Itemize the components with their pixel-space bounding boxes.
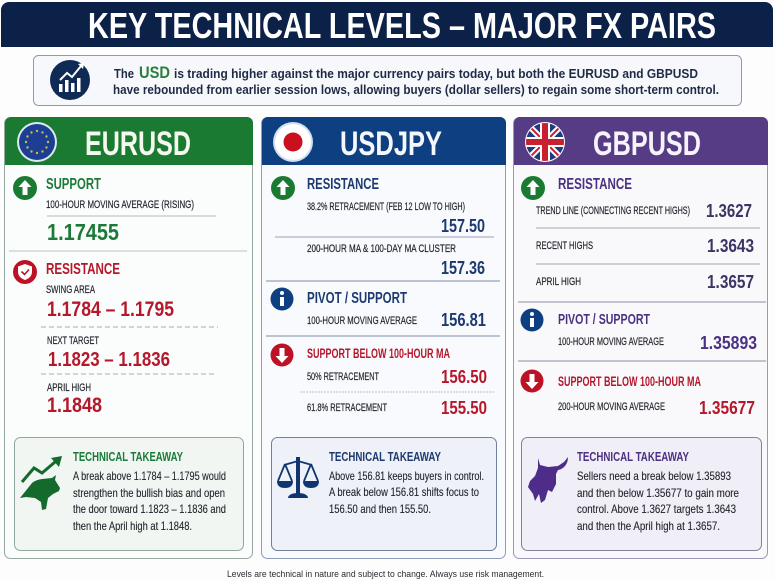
value: april high: 1.1848 — [47, 394, 102, 417]
icon: up arrow — [521, 176, 545, 200]
pair name: EURUSD: EURUSD — [85, 125, 191, 163]
takeaway text: A break above 1.1784 – 1.1795 would — [73, 469, 226, 483]
panel header: GBPUSD — [514, 117, 768, 165]
icon: bear market bull — [528, 457, 568, 503]
panel: EURUSD — [4, 117, 253, 558]
takeaway text — [329, 469, 484, 516]
label: 61.8% retracement: 61.8% RETRACEMENT — [307, 402, 387, 414]
panel header: EURUSD — [5, 117, 253, 165]
takeaway text: then the April high at 1.1848. — [73, 519, 192, 533]
intro text: have rebounded from earlier session lows, allowing buyers (dollar sellers) to regain some short-term control. — [113, 82, 719, 97]
title banner — [1, 2, 773, 47]
value: 157.36: 157.36 — [441, 258, 485, 278]
intro text: USD — [139, 63, 170, 82]
icon: shield — [13, 260, 37, 284]
takeaway text: Above 156.81 keeps buyers in control. — [329, 469, 484, 483]
heading: pivot / support: PIVOT / SUPPORT — [558, 311, 650, 328]
icon: balance scales — [277, 457, 319, 498]
label: 100-hour MA: 100-HOUR MOVING AVERAGE — [558, 336, 664, 348]
heading: support: SUPPORT — [46, 176, 101, 193]
panel: GBPUSD — [514, 117, 768, 558]
value: 155.50: 155.50 — [441, 398, 487, 418]
value: 157.50: 157.50 — [441, 216, 485, 236]
icon: info — [270, 288, 294, 310]
takeaway text: A break below 156.81 shifts focus to — [329, 485, 479, 499]
icon: up arrow — [13, 176, 37, 200]
value: 156.50: 156.50 — [441, 367, 487, 387]
icon: bull and rising arrow — [20, 456, 62, 510]
heading: resistance: RESISTANCE — [558, 176, 632, 193]
label: next target: NEXT TARGET — [47, 335, 99, 347]
pair name: GBPUSD: GBPUSD — [593, 125, 701, 163]
takeaway heading: TECHNICAL TAKEAWAY — [329, 449, 441, 464]
heading: pivot / support: PIVOT / SUPPORT — [307, 290, 407, 307]
label: 50% retracement: 50% RETRACEMENT — [307, 371, 379, 383]
takeaway heading: TECHNICAL TAKEAWAY — [73, 449, 183, 464]
takeaway text: control. Above 1.3627 targets 1.3643 — [577, 502, 736, 516]
icon: rising chart — [50, 60, 90, 100]
label: recent highs: RECENT HIGHS — [536, 240, 593, 252]
value: support level: 1.17455 — [47, 219, 119, 245]
footer note: Levels are technical in nature and subject to change. Always use risk management. — [227, 569, 544, 580]
value: 1.3643: 1.3643 — [707, 236, 754, 256]
value: 1.35893: 1.35893 — [700, 333, 757, 353]
takeaway text — [577, 469, 739, 533]
value: 1.35677: 1.35677 — [699, 398, 755, 418]
intro text: is trading higher against the major currency pairs today, but both the EURUSD and GBPUSD — [174, 66, 698, 81]
takeaway: EURUSD — [14, 438, 244, 550]
takeaway heading: TECHNICAL TAKEAWAY — [577, 449, 689, 464]
icon: down arrow — [520, 370, 544, 392]
value: 156.81: 156.81 — [441, 310, 486, 330]
intro text — [113, 63, 719, 97]
heading: support below MA: SUPPORT BELOW 100-HOUR MA — [307, 346, 450, 361]
pair name: USDJPY: USDJPY — [340, 125, 442, 163]
intro callout — [34, 56, 742, 106]
takeaway: USDJPY — [272, 438, 496, 550]
takeaway text — [73, 469, 226, 533]
takeaway text: Sellers need a break below 1.35893 — [577, 469, 731, 483]
takeaway text: and then below 1.35677 to gain more — [577, 486, 739, 500]
intro text: The — [114, 66, 134, 81]
value: swing area: 1.1784 – 1.1795 — [47, 298, 174, 321]
label: swing area: SWING AREA — [46, 284, 96, 296]
label: april high: APRIL HIGH — [47, 382, 91, 394]
icon: EU flag — [17, 122, 57, 162]
icon: info — [520, 308, 544, 332]
icon: Japan flag — [273, 122, 313, 162]
takeaway text: 156.50 and then 155.50. — [329, 502, 431, 516]
value: 1.3657: 1.3657 — [707, 272, 754, 292]
value: 1.3627: 1.3627 — [706, 201, 752, 221]
label: 38.2% retracement: 38.2% RETRACEMENT (FEB 12 LOW TO HIGH) — [307, 201, 465, 213]
label: trend line: TREND LINE (CONNECTING RECENT HIGHS) — [536, 205, 690, 217]
icon: down arrow — [270, 344, 294, 366]
label: april high: APRIL HIGH — [536, 276, 581, 288]
heading: resistance: RESISTANCE — [307, 176, 379, 193]
heading: resistance: RESISTANCE — [46, 261, 120, 278]
label: MA cluster: 200-HOUR MA & 100-DAY MA CLUSTER — [307, 243, 456, 255]
takeaway text: and then the April high at 1.3657. — [577, 519, 720, 533]
value: next target: 1.1823 – 1.1836 — [48, 348, 170, 371]
label: 100-hour MA: 100-HOUR MOVING AVERAGE (RISING) — [46, 199, 194, 211]
label: 200-hour MA: 200-HOUR MOVING AVERAGE — [558, 401, 665, 413]
label: 100-hour MA: 100-HOUR MOVING AVERAGE — [307, 315, 417, 327]
panel: USDJPY — [262, 117, 506, 558]
icon: UK flag — [525, 122, 565, 162]
takeaway: GBPUSD — [522, 438, 762, 550]
heading: support below MA: SUPPORT BELOW 100-HOUR MA — [558, 374, 701, 389]
icon: up arrow — [271, 176, 295, 200]
takeaway text: the door toward 1.1823 – 1.1836 and — [73, 502, 226, 516]
panel header: USDJPY — [262, 117, 506, 165]
takeaway text: strengthen the bullish bias and open — [73, 486, 225, 500]
